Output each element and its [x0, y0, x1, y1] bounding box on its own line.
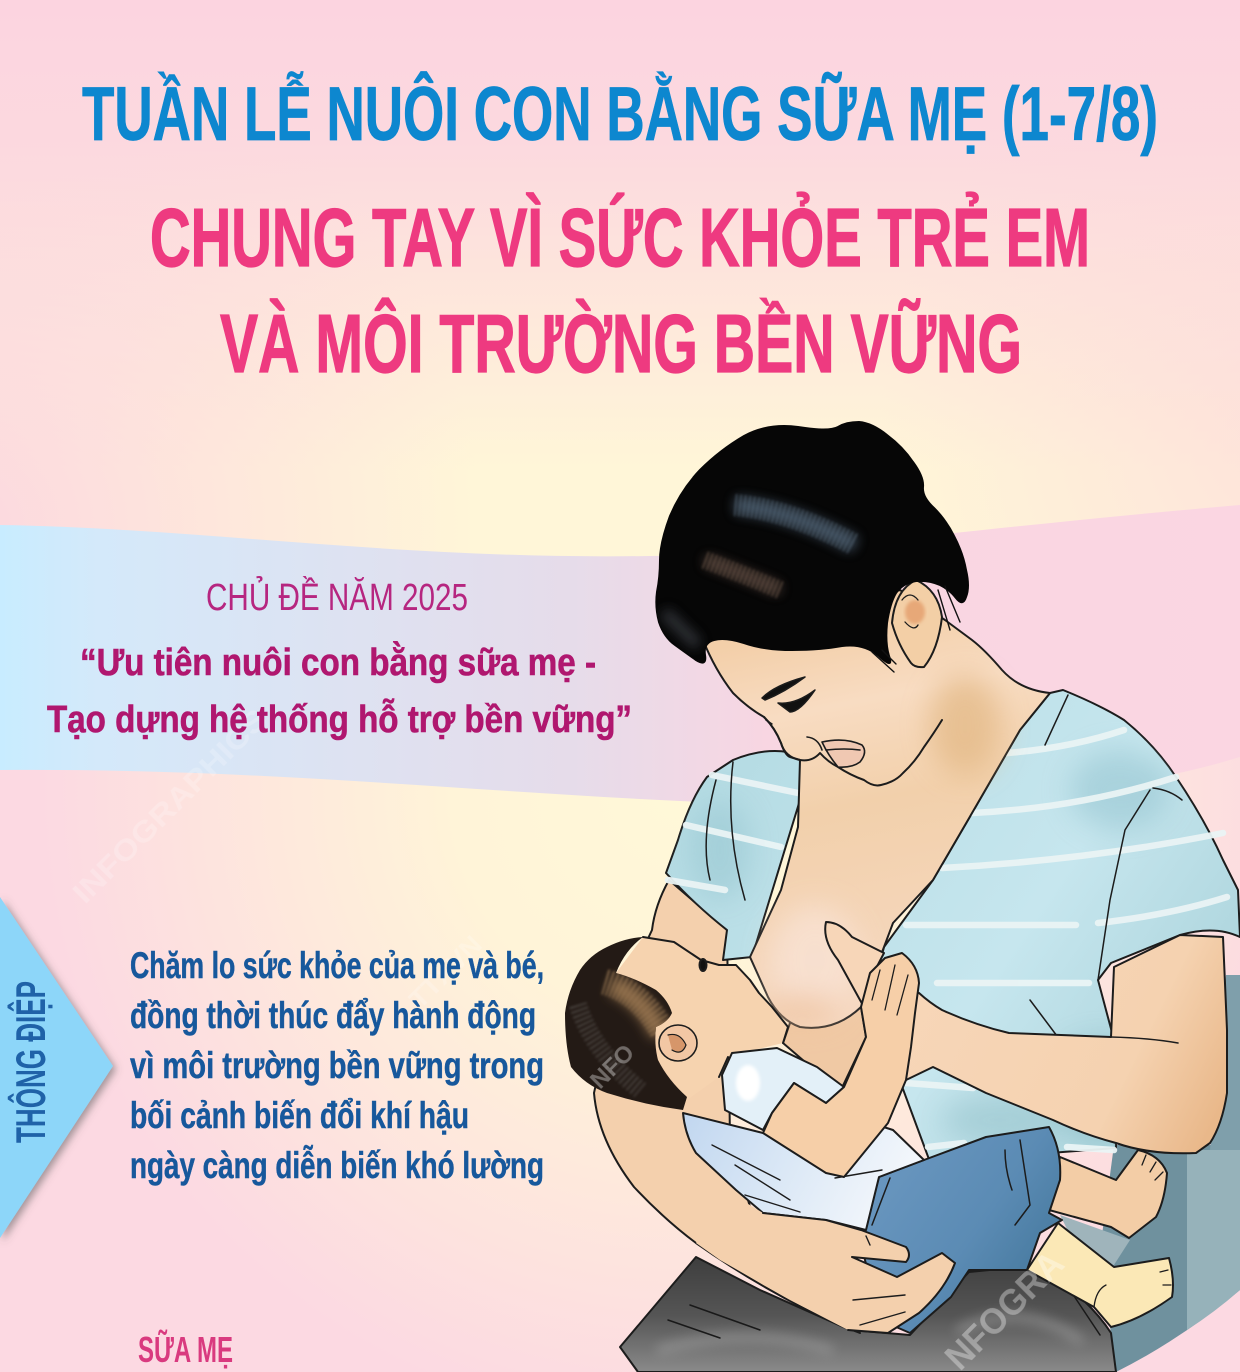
message text: ngày càng diễn biến khó lường — [130, 1145, 544, 1186]
baby's trousers — [860, 1127, 1062, 1333]
message text: đồng thời thúc đẩy hành động — [130, 995, 536, 1036]
mother's hair — [656, 422, 968, 672]
message text: vì môi trường bền vững trong — [130, 1045, 544, 1086]
theme quote: “Ưu tiên nuôi con bằng sữa mẹ - — [80, 640, 596, 684]
theme label: CHỦ ĐỀ NĂM 2025 — [206, 575, 468, 619]
arm crease — [1111, 1037, 1178, 1043]
shirt shading — [690, 750, 1170, 1145]
baby's ear — [659, 1025, 697, 1061]
baby's head — [616, 937, 788, 1100]
watermark: INFOGRAPHICS — [67, 703, 274, 910]
mother's supporting arm — [594, 880, 860, 1333]
baby's shirt — [683, 1110, 924, 1230]
baby's eye — [700, 959, 706, 971]
watermark — [67, 703, 488, 1014]
mother's hand — [696, 1190, 955, 1333]
message text — [130, 945, 544, 1186]
shirt stripes — [668, 730, 1227, 1150]
shirt fold lines — [706, 695, 1182, 1040]
wave band — [0, 505, 1240, 805]
theme quote: Tạo dựng hệ thống hỗ trợ bền vững” — [47, 697, 632, 741]
baby's arm and hand — [763, 953, 919, 1177]
footer label: SỮA MẸ — [138, 1328, 233, 1370]
watermark: TTXVN — [403, 929, 488, 1014]
theme quote — [47, 640, 632, 741]
chair back — [1060, 975, 1240, 1372]
baby's hair — [565, 937, 687, 1110]
watermark on illustration: NFO — [585, 1039, 640, 1094]
belly skin — [783, 1007, 866, 1092]
baby's sleeve — [722, 1048, 844, 1130]
message arrow tab: THÔNG ĐIỆP — [6, 981, 54, 1143]
message text: bối cảnh biến đổi khí hậu — [130, 1095, 469, 1136]
closed eye and eyebrow — [762, 677, 815, 724]
baby's front leg — [1027, 1223, 1173, 1327]
neck and chest shading — [760, 675, 1001, 1024]
mouth and nose — [807, 737, 865, 767]
message text: Chăm lo sức khỏe của mẹ và bé, — [130, 945, 544, 986]
shirt — [666, 690, 1240, 1162]
mother's lap — [620, 1257, 1116, 1372]
baby's back leg — [1049, 1150, 1167, 1238]
face outline — [764, 717, 942, 785]
watermark on illustration — [585, 1039, 1072, 1372]
mother's head, neck and chest — [703, 590, 1050, 1028]
mother's forearm and thumb — [825, 922, 1227, 1153]
message arrow tab — [0, 897, 113, 1238]
ear — [892, 580, 942, 667]
illustration: mother breastfeeding baby — [565, 422, 1240, 1372]
